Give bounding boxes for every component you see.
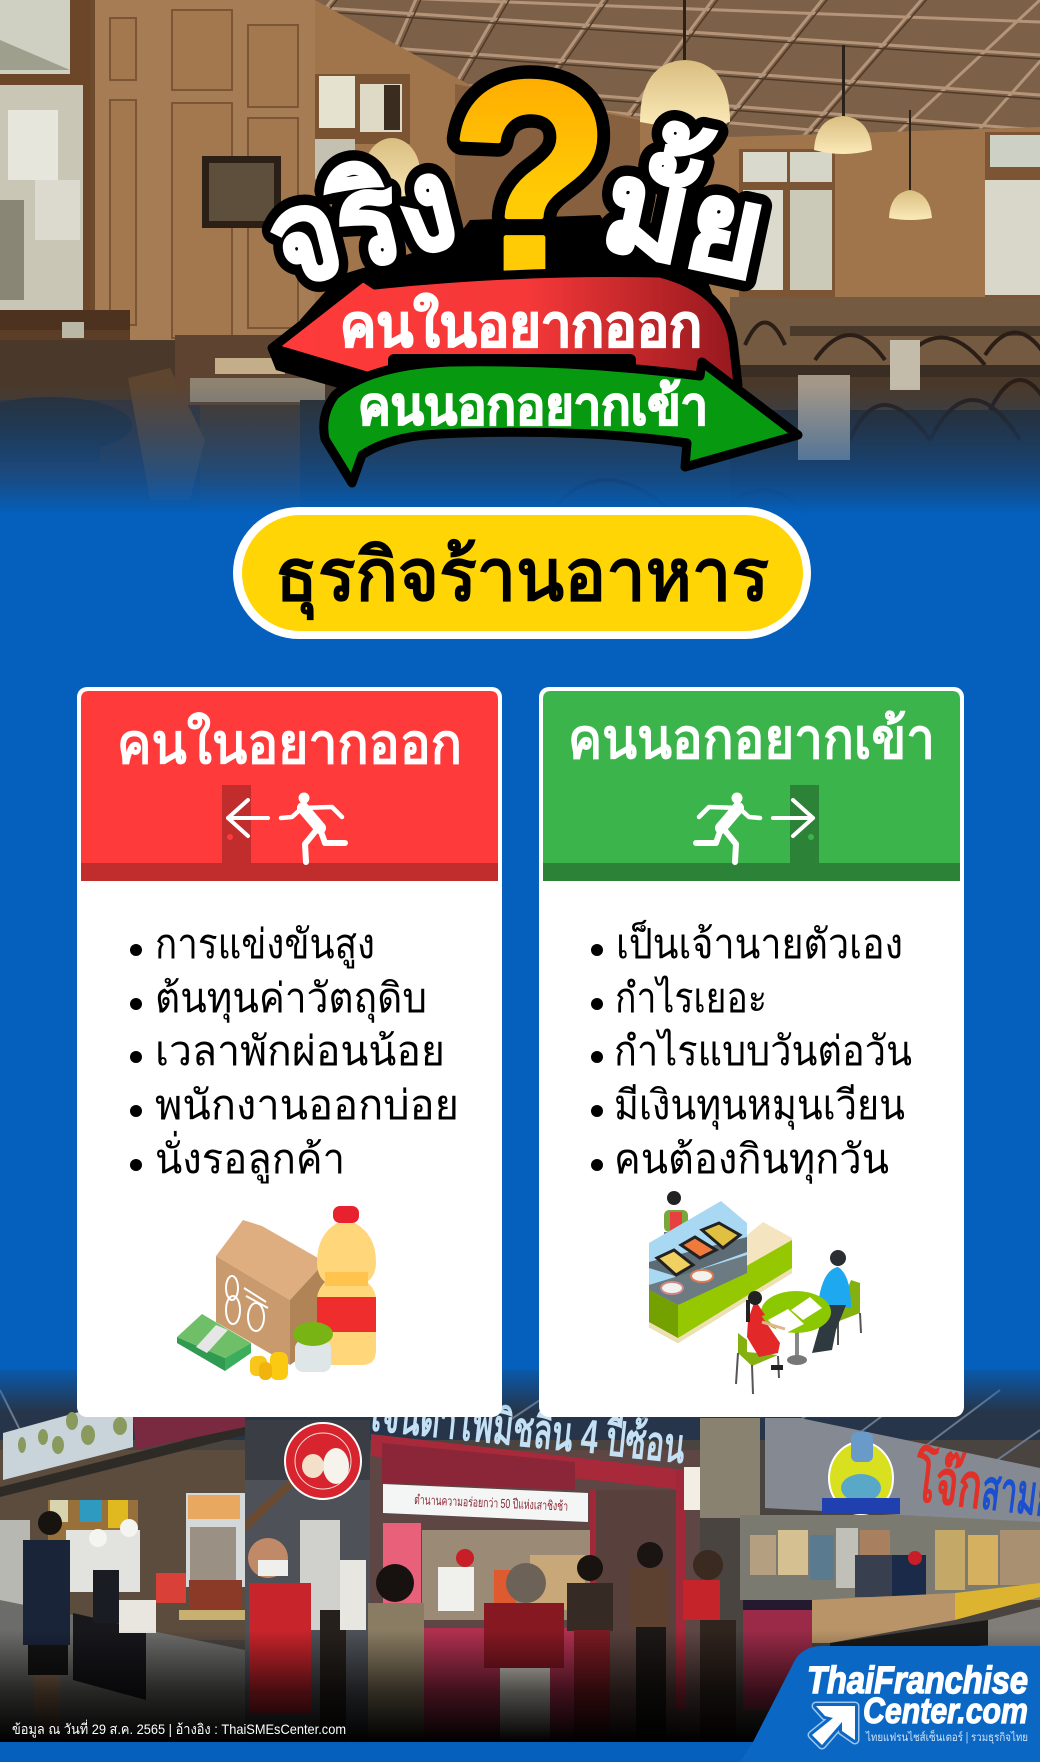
counter xyxy=(735,1222,792,1270)
green arrow label: คนนอกอยากเข้า xyxy=(358,378,708,436)
panel header xyxy=(81,691,498,881)
list: reasons to enter: กำไรเยอะ xyxy=(615,975,767,1021)
red frame and lattice xyxy=(371,1434,684,1490)
small sign xyxy=(684,1467,724,1510)
list: reasons to enter: เป็นเจ้านายตัวเอง xyxy=(616,920,903,967)
illustration: bag, oil bottle, cash and coins xyxy=(177,1206,376,1380)
man and chair xyxy=(834,1280,860,1323)
pink counter xyxy=(424,1628,574,1742)
neon sign text: เจนตาไฟมิชลิน 4 ปีซ้อน xyxy=(369,1385,688,1474)
shop name: โจ๊ก xyxy=(910,1442,987,1522)
logo: ThaiFranchise Center.com xyxy=(740,1646,1040,1762)
list: reasons to enter: กำไรแบบวันต่อวัน xyxy=(614,1028,912,1074)
photo: food court stalls xyxy=(0,1362,1040,1742)
title logo: จริงมั้ย question xyxy=(255,25,798,483)
icon: entry door with running person xyxy=(696,785,819,863)
question mark: ? xyxy=(450,25,610,333)
list: reasons to enter: มีเงินทุนหมุนเวียน xyxy=(614,1082,905,1130)
white banner xyxy=(383,1484,588,1522)
blue fade xyxy=(0,385,1040,532)
yellow round logo xyxy=(822,1432,900,1514)
question mark: ? xyxy=(450,25,610,333)
list: reasons to enter xyxy=(591,920,912,1184)
red arrow xyxy=(272,272,738,385)
black backing xyxy=(300,215,715,320)
green arrow xyxy=(324,362,798,483)
panel title: คนในอยากออก xyxy=(117,711,462,775)
wood fence xyxy=(812,1593,955,1643)
people xyxy=(248,1538,736,1742)
photo: food court stalls: ตำนานความอร่อยกว่า 50 ปีแห่งเสาชิงช้า xyxy=(414,1492,568,1514)
word: จริง: จริง xyxy=(255,131,469,314)
lower furniture xyxy=(0,340,1040,530)
server xyxy=(664,1210,688,1232)
list: reasons to leave: การแข่งขันสูง xyxy=(155,921,375,969)
panel header xyxy=(543,691,960,881)
robinhood board xyxy=(743,1573,812,1611)
panel: คนนอกอยากเข้า xyxy=(539,687,964,1417)
heading pill: ธุรกิจร้านอาหาร xyxy=(233,507,811,639)
photo: restaurant interior xyxy=(0,0,1040,532)
heading pill: ธุรกิจร้านอาหาร: ธุรกิจร้านอาหาร xyxy=(275,536,769,621)
panel: คนในอยากออก xyxy=(77,687,502,1417)
list: reasons to leave: นั่งรอลูกค้า xyxy=(155,1131,345,1184)
center stall background xyxy=(245,1420,370,1742)
logo arrow icon xyxy=(812,1706,855,1745)
list: reasons to leave xyxy=(130,921,459,1184)
list: reasons to enter: คนต้องกินทุกวัน xyxy=(614,1136,889,1184)
word: จริง: จริง xyxy=(255,131,469,314)
picture frame xyxy=(202,156,281,228)
right stall xyxy=(700,1418,760,1518)
roof xyxy=(0,1370,1040,1440)
round logo xyxy=(285,1423,361,1499)
table xyxy=(795,1330,799,1360)
icon: exit door with running person xyxy=(222,785,345,863)
bottom blue band xyxy=(0,1742,1040,1762)
list: reasons to leave: ต้นทุนค่าวัตถุดิบ xyxy=(155,975,427,1023)
illustration: food counter and diners xyxy=(649,1191,861,1394)
word: มั้ย: มั้ย xyxy=(591,111,782,307)
left stall xyxy=(0,1450,245,1640)
red arrow label: คนในอยากออก xyxy=(340,292,702,359)
word: มั้ย: มั้ย xyxy=(591,111,782,307)
panel title: คนนอกอยากเข้า xyxy=(568,707,935,770)
fades xyxy=(0,1362,1040,1412)
list: reasons to leave: เวลาพักผ่อนน้อย xyxy=(155,1028,445,1074)
woman and chair xyxy=(738,1333,778,1366)
footer source text: ข้อมูล ณ วันที่ 29 ส.ค. 2565 | อ้างอิง : ThaiSMEsCenter.com xyxy=(12,1720,346,1738)
lamps xyxy=(683,0,686,62)
list: reasons to leave: พนักงานออกบ่อย xyxy=(155,1082,459,1128)
